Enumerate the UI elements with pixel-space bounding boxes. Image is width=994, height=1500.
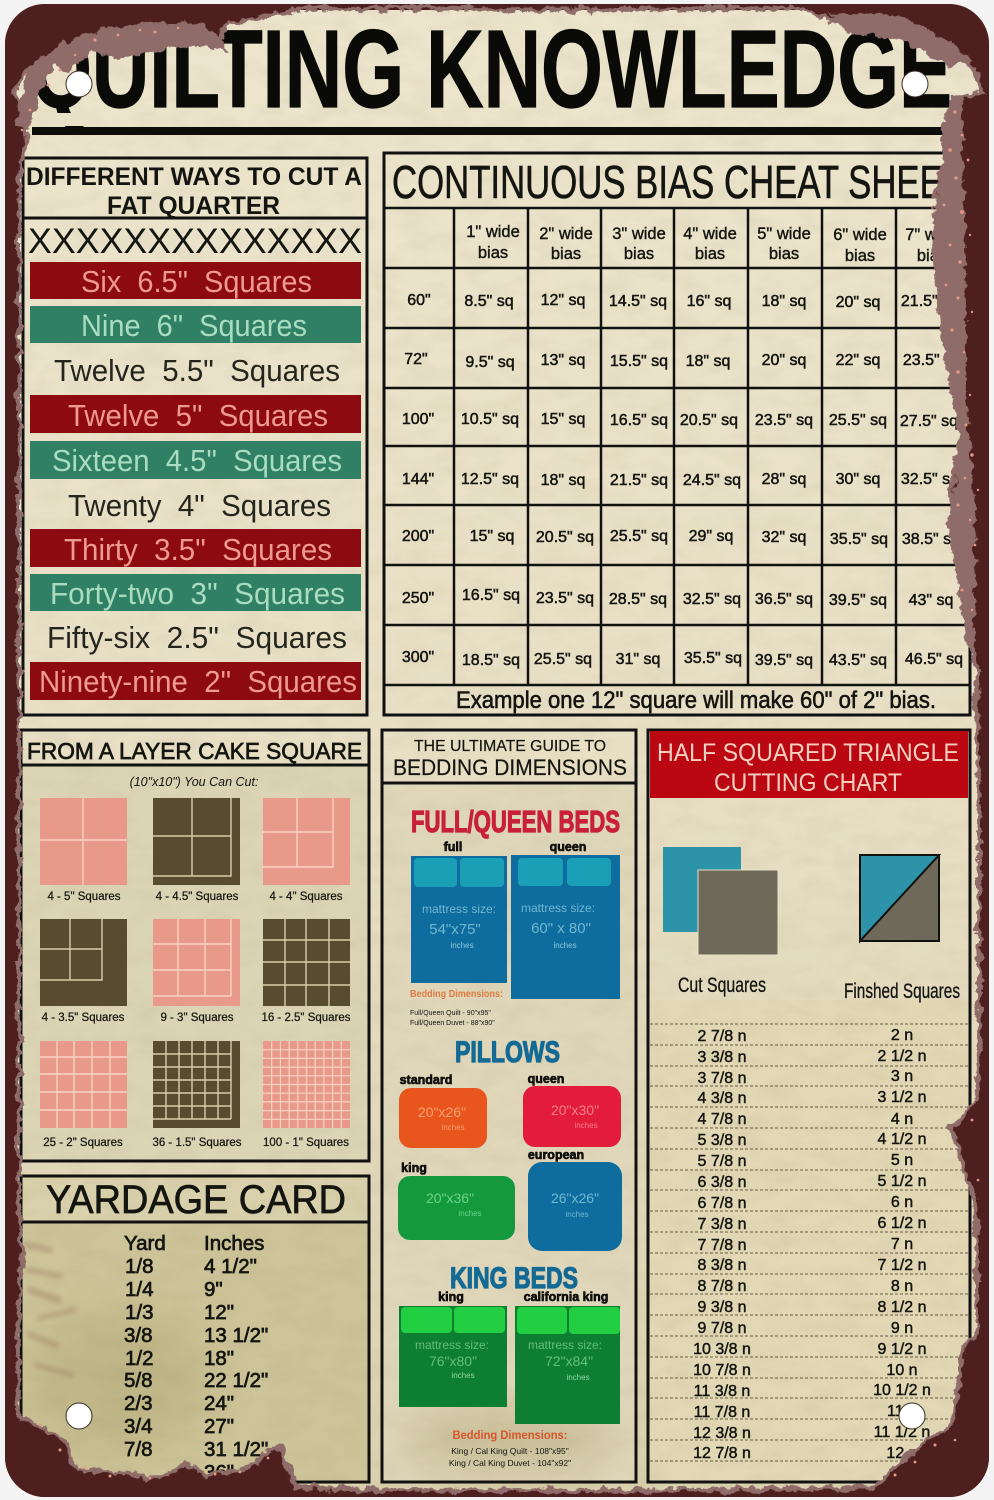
row: nine squares: Nine 6" Squares <box>81 308 307 343</box>
pillow: standard <box>399 1073 487 1148</box>
note: full queen bedding dimensions: Full/Queen Duvet - 88"x90" <box>410 1020 495 1027</box>
table header: bias <box>624 245 654 263</box>
row 250 inches: 32.5" sq <box>683 591 741 608</box>
row 300 inches: 18.5" sq <box>462 652 520 669</box>
heading: layer cake: FROM A LAYER CAKE SQUARE <box>27 738 362 764</box>
icon: finished square <box>844 855 960 1003</box>
row 72 inches: 22" sq <box>836 352 880 369</box>
bed: king <box>399 1290 507 1407</box>
yardage table: 12" <box>204 1301 234 1324</box>
yardage table: 13 1/2" <box>204 1324 268 1347</box>
row 144 inches: 32.5" sq <box>901 471 959 488</box>
cutting chart table: 3 7/8 n <box>698 1070 746 1087</box>
bed: california king: california king <box>524 1290 608 1304</box>
yardage table: 1/3 <box>125 1301 154 1324</box>
row 60 inches <box>407 292 959 311</box>
cutting chart table: 7 1/2 n <box>878 1257 926 1274</box>
table header: 4" wide <box>683 225 737 243</box>
yardage table <box>124 1232 268 1484</box>
yardage table: 27" <box>204 1415 234 1438</box>
row 250 inches: 39.5" sq <box>829 592 887 609</box>
row 100 inches: 25.5" sq <box>829 412 887 429</box>
mounting holes <box>66 71 928 1429</box>
note: full queen bedding dimensions <box>410 989 503 1027</box>
row 200 inches: 29" sq <box>689 528 733 545</box>
cutting chart table: 9 3/8 n <box>698 1299 746 1316</box>
pillow: standard: standard <box>400 1073 452 1087</box>
row 60 inches: 18" sq <box>762 293 806 310</box>
tile captions: 4 - 4.5" Squares <box>156 891 239 903</box>
pillow: european <box>528 1148 622 1251</box>
row 300 inches: 300" <box>402 649 434 666</box>
pillow: european: 26"x26" <box>551 1190 599 1206</box>
row 300 inches: 43.5" sq <box>829 652 887 669</box>
pillow: king: king <box>401 1161 427 1175</box>
cutting chart table: 4 n <box>891 1111 913 1128</box>
note: king bedding dimensions: Bedding Dimensions: <box>452 1428 568 1442</box>
bed: king: mattress size: <box>415 1338 489 1352</box>
pillow: queen: inches <box>574 1121 598 1130</box>
cutting chart table: 12 7/8 n <box>693 1445 751 1462</box>
row 250 inches <box>402 587 953 609</box>
row 60 inches: 8.5" sq <box>464 293 514 310</box>
cutting chart table: 2 1/2 n <box>878 1048 926 1065</box>
row 200 inches: 20.5" sq <box>536 529 594 546</box>
row: twelve 5 squares: Twelve 5" Squares <box>68 398 328 433</box>
row 72 inches: 15.5" sq <box>610 353 668 370</box>
cutting chart table: 11 3/8 n <box>694 1383 750 1400</box>
pillow: queen: queen <box>528 1072 564 1086</box>
row: thirty squares: Thirty 3.5" Squares <box>64 532 332 567</box>
row 100 inches: 20.5" sq <box>680 412 738 429</box>
pillow: standard: 20"x26" <box>418 1104 466 1120</box>
yardage table: 1/2 <box>125 1347 154 1370</box>
row 72 inches: 13" sq <box>541 352 585 369</box>
row 144 inches: 24.5" sq <box>683 472 741 489</box>
bed: california king: 72"x84" <box>545 1353 593 1369</box>
table header <box>466 223 959 265</box>
bed: king: 76"x80" <box>429 1353 477 1369</box>
row 144 inches: 28" sq <box>762 471 806 488</box>
yardage table: 1/8 <box>125 1255 154 1278</box>
row 72 inches: 23.5" sq <box>903 352 961 369</box>
row 200 inches: 25.5" sq <box>610 528 668 545</box>
tile: 4-5 inch squares <box>40 798 127 885</box>
cutting chart table: 5 3/8 n <box>698 1132 746 1149</box>
example note: Example one 12" square will make 60" of 2" bias. <box>456 687 936 714</box>
bed: full: full <box>444 840 462 854</box>
tile captions: 4 - 3.5" Squares <box>42 1012 125 1024</box>
heading: pillows: PILLOWS <box>455 1036 560 1069</box>
icon: cut squares <box>663 847 778 997</box>
tile captions: 16 - 2.5" Squares <box>261 1012 351 1024</box>
cutting chart table: 7 3/8 n <box>698 1216 746 1233</box>
cutting chart table: 7 n <box>891 1236 913 1253</box>
bed: king: inches <box>451 1371 475 1380</box>
note: king bedding dimensions <box>449 1428 571 1468</box>
rust patch: right side flaking <box>934 96 976 650</box>
cutting chart table: 12 n <box>886 1445 918 1462</box>
cutting chart table: 11 1/2 n <box>874 1424 930 1441</box>
yardage table: 1/4 <box>125 1278 154 1301</box>
tile: 9-3 inch squares <box>153 919 240 1006</box>
cutting chart table: 8 n <box>891 1278 913 1295</box>
row 72 inches: 18" sq <box>686 353 730 370</box>
cutting chart table: 10 3/8 n <box>693 1341 751 1358</box>
table header: 2" wide <box>539 225 593 243</box>
cutting chart table: 11 7/8 n <box>694 1404 750 1421</box>
row 60 inches: 14.5" sq <box>609 293 667 310</box>
row 250 inches: 250" <box>402 590 434 607</box>
table header: bias <box>917 247 947 265</box>
tile captions <box>42 891 351 1149</box>
bed: california king <box>515 1290 620 1424</box>
row 100 inches: 27.5" sq <box>900 413 958 430</box>
cutting chart table: 3 1/2 n <box>878 1089 926 1106</box>
cutting chart table: 10 7/8 n <box>693 1362 751 1379</box>
table header: 1" wide <box>466 223 520 241</box>
yardage table: 9" <box>204 1278 223 1301</box>
table header: 6" wide <box>833 226 887 244</box>
cutting chart table: 9 7/8 n <box>698 1320 746 1337</box>
cutting chart table: 10 n <box>886 1362 918 1379</box>
tile: 16-2.5 inch squares <box>263 919 350 1006</box>
cutting chart table: 3 n <box>891 1068 913 1085</box>
row 144 inches <box>402 471 959 489</box>
tile captions: 9 - 3" Squares <box>160 1012 234 1024</box>
yardage table: 22 1/2" <box>204 1369 268 1392</box>
row: sixteen squares: Sixteen 4.5" Squares <box>52 443 342 478</box>
table header: 5" wide <box>757 225 811 243</box>
cutting chart table: 4 3/8 n <box>698 1090 746 1107</box>
yardage table: 18" <box>204 1347 234 1370</box>
stains: yardage left side <box>26 1245 74 1375</box>
table header: 3" wide <box>612 225 666 243</box>
panel: continuous bias cheat sheet <box>384 153 970 715</box>
row 200 inches: 15" sq <box>470 528 514 545</box>
row 72 inches: 20" sq <box>762 352 806 369</box>
yardage table: 3/4 <box>124 1415 152 1438</box>
tile captions: 4 - 5" Squares <box>47 891 121 903</box>
bed: full: mattress size: <box>422 902 496 916</box>
table header: bias <box>551 245 581 263</box>
pillow: european: european <box>528 1148 584 1162</box>
panel: bedding dimensions <box>381 730 637 1482</box>
cutting chart table: 7 7/8 n <box>698 1237 746 1254</box>
cutting chart table: 4 1/2 n <box>878 1131 926 1148</box>
stitched x row: XXXXXXXXXXXXXX <box>28 222 362 261</box>
row 250 inches: 28.5" sq <box>609 591 667 608</box>
row 100 inches <box>402 411 958 430</box>
tile: 100-1 inch squares <box>263 1041 350 1128</box>
yardage table: 2/3 <box>124 1392 152 1415</box>
pillow: king: inches <box>458 1209 482 1218</box>
tile captions: 100 - 1" Squares <box>263 1137 349 1149</box>
yardage table: 4 1/2" <box>204 1255 257 1278</box>
pillow: queen: 20"x30" <box>551 1102 599 1118</box>
cutting chart table: 12 3/8 n <box>693 1425 751 1442</box>
yardage table: 7/8 <box>124 1438 152 1461</box>
row 144 inches: 21.5" sq <box>610 472 668 489</box>
row: six squares: Six 6.5" Squares <box>81 264 312 299</box>
cutting chart table: 6 1/2 n <box>878 1215 926 1232</box>
bed: california king: mattress size: <box>528 1338 602 1352</box>
row: nine squares <box>30 306 361 343</box>
cutting chart table: 9 n <box>891 1320 913 1337</box>
rust patch: top left <box>14 22 228 128</box>
tile: 4-4 inch squares <box>263 798 350 885</box>
cutting chart table: 5 n <box>891 1152 913 1169</box>
yardage table: Yard <box>124 1232 166 1255</box>
tile: 25-2 inch squares <box>40 1041 127 1128</box>
heading: bedding guide <box>393 738 627 780</box>
yardage table: 3/8 <box>124 1324 152 1347</box>
pillow: queen <box>523 1072 621 1147</box>
row 300 inches: 31" sq <box>616 651 660 668</box>
bed: queen: inches <box>553 941 577 950</box>
heading: half squared triangle: CUTTING CHART <box>714 769 902 797</box>
row 60 inches: 21.5" sq <box>901 293 959 310</box>
heading: fat quarter <box>26 163 362 220</box>
row: twelve 5.5 squares: Twelve 5.5" Squares <box>54 353 340 388</box>
row 72 inches: 9.5" sq <box>465 354 515 371</box>
bed: queen: 60" x 80" <box>531 920 591 937</box>
panel: half squared triangle cutting chart <box>648 730 970 1482</box>
row 100 inches: 10.5" sq <box>461 411 519 428</box>
heading: half squared triangle: HALF SQUARED TRIANGLE <box>657 739 959 767</box>
pillow: standard: inches <box>441 1123 465 1132</box>
bed: queen <box>511 840 620 999</box>
yardage table: 36" <box>204 1461 234 1484</box>
cutting chart table: 11 n <box>887 1403 917 1420</box>
row 60 inches: 60" <box>407 292 431 309</box>
table grid <box>384 208 970 685</box>
cutting chart table: 5 1/2 n <box>878 1173 926 1190</box>
row 100 inches: 15" sq <box>541 411 585 428</box>
table header: bias <box>695 245 725 263</box>
bed: queen: queen <box>550 840 586 854</box>
heading: full queen beds: FULL/QUEEN BEDS <box>411 804 620 839</box>
cutting chart table: 2 7/8 n <box>698 1028 746 1045</box>
row 144 inches: 18" sq <box>541 472 585 489</box>
tile captions: 4 - 4" Squares <box>269 891 343 903</box>
row 200 inches: 38.5" sq <box>902 531 960 548</box>
yardage table: 24" <box>204 1392 234 1415</box>
bed: full <box>411 840 507 983</box>
heading: king beds: KING BEDS <box>450 1262 578 1295</box>
row 250 inches: 43" sq <box>909 592 953 609</box>
cutting chart table: 5 7/8 n <box>698 1153 746 1170</box>
tile captions: 25 - 2" Squares <box>43 1137 123 1149</box>
pillow: king: 20"x36" <box>426 1190 474 1206</box>
row 60 inches: 20" sq <box>836 294 880 311</box>
bed: california king: inches <box>566 1373 590 1382</box>
row 200 inches <box>402 528 960 548</box>
row 300 inches <box>402 649 963 669</box>
heading: fat quarter: FAT QUARTER <box>107 192 280 220</box>
row 100 inches: 16.5" sq <box>610 412 668 429</box>
cutting chart table: 2 n <box>891 1027 913 1044</box>
row 250 inches: 16.5" sq <box>462 587 520 604</box>
heading: bedding guide: THE ULTIMATE GUIDE TO <box>414 738 606 755</box>
row: forty-two squares: Forty-two 3" Squares <box>50 576 345 611</box>
row 100 inches: 23.5" sq <box>755 412 813 429</box>
row 60 inches: 16" sq <box>687 293 731 310</box>
row 72 inches <box>404 351 961 371</box>
panel: different ways to cut a fat quarter <box>22 158 367 715</box>
cutting chart table: 6 3/8 n <box>698 1174 746 1191</box>
note: full queen bedding dimensions: Bedding Dimensions: <box>410 989 503 1000</box>
tile: 4-3.5 inch squares <box>40 919 127 1006</box>
row 250 inches: 23.5" sq <box>536 590 594 607</box>
note: full queen bedding dimensions: Full/Queen Quilt - 90"x95" <box>410 1010 491 1017</box>
heading: fat quarter: DIFFERENT WAYS TO CUT A <box>26 163 362 191</box>
row 200 inches: 35.5" sq <box>830 531 888 548</box>
row 144 inches: 144" <box>402 471 434 488</box>
cutting chart table: 8 3/8 n <box>698 1257 746 1274</box>
row 300 inches: 25.5" sq <box>534 651 592 668</box>
cutting chart table: 6 7/8 n <box>698 1195 746 1212</box>
bed: full: inches <box>450 941 474 950</box>
heading: half squared triangle <box>650 731 968 798</box>
row 200 inches: 32" sq <box>762 529 806 546</box>
cutting chart table: 8 1/2 n <box>878 1299 926 1316</box>
row 300 inches: 35.5" sq <box>684 650 742 667</box>
panel: yardage card <box>20 1176 370 1484</box>
bed: full: 54"x75" <box>429 921 481 938</box>
table header: bias <box>478 244 508 262</box>
row 60 inches: 12" sq <box>541 292 585 309</box>
row: fifty-six squares: Fifty-six 2.5" Squares <box>47 620 347 655</box>
cutting chart table: 6 n <box>891 1194 913 1211</box>
rust patch: top right <box>830 14 972 66</box>
row 144 inches: 12.5" sq <box>461 471 519 488</box>
tile captions: 36 - 1.5" Squares <box>152 1137 242 1149</box>
cutting chart table: 4 7/8 n <box>698 1111 746 1128</box>
row 144 inches: 30" sq <box>836 471 880 488</box>
cutting chart table <box>650 1024 968 1462</box>
row: twenty squares: Twenty 4" Squares <box>68 488 331 523</box>
row: ninety-nine squares: Ninety-nine 2" Squares <box>39 664 357 699</box>
cutting chart table: 8 7/8 n <box>698 1278 746 1295</box>
row 72 inches: 72" <box>404 351 428 368</box>
yardage table: 5/8 <box>124 1369 152 1392</box>
table header: 7" wide <box>905 226 959 244</box>
icon: cut squares: Cut Squares <box>678 974 766 997</box>
yardage table: 31 1/2" <box>204 1438 268 1461</box>
heading: yardage card: YARDAGE CARD <box>46 1178 346 1222</box>
cutting chart table: 3 3/8 n <box>698 1049 746 1066</box>
note: king bedding dimensions: King / Cal King Quilt - 108"x95" <box>451 1446 569 1456</box>
bed: queen: mattress size: <box>521 901 595 915</box>
pillow: king <box>398 1161 515 1240</box>
bed: king: king <box>438 1290 464 1304</box>
table header: bias <box>769 245 799 263</box>
row 300 inches: 39.5" sq <box>755 652 813 669</box>
cutting chart table: 9 1/2 n <box>878 1341 926 1358</box>
panel: from a layer cake square <box>20 730 370 1161</box>
subheading: you can cut: (10"x10") You Can Cut: <box>130 775 258 789</box>
table header: bias <box>845 247 875 265</box>
yardage table: Inches <box>204 1232 264 1255</box>
tile: 36-1.5 inch squares <box>153 1041 240 1128</box>
row 200 inches: 200" <box>402 528 434 545</box>
pillow: european: inches <box>565 1210 589 1219</box>
heading: bedding guide: BEDDING DIMENSIONS <box>393 755 627 780</box>
note: king bedding dimensions: King / Cal King Duvet - 104"x92" <box>449 1458 571 1468</box>
cutting chart table: 10 1/2 n <box>873 1382 931 1399</box>
row 250 inches: 36.5" sq <box>755 591 813 608</box>
tile: 4-4.5 inch squares <box>153 798 240 885</box>
row 300 inches: 46.5" sq <box>905 651 963 668</box>
row 100 inches: 100" <box>402 411 434 428</box>
